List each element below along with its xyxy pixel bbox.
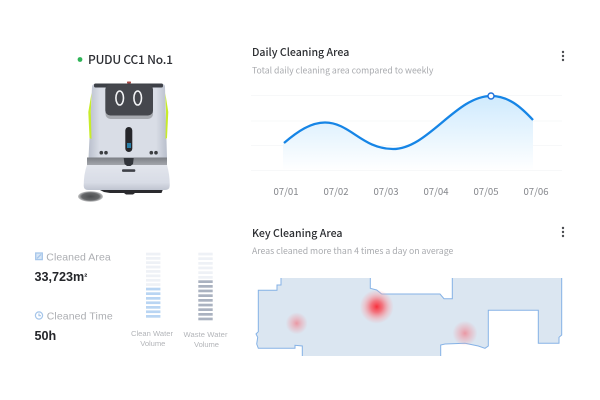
x axis labels: 07/02 xyxy=(323,184,349,198)
map shape xyxy=(256,278,562,356)
icon: area xyxy=(36,253,42,260)
waste water bars xyxy=(198,253,213,320)
value: 50h xyxy=(34,329,56,343)
value: 33,723m xyxy=(34,270,84,284)
gauge: waste water volume xyxy=(184,253,228,349)
x axis labels: 07/06 xyxy=(523,184,549,198)
icon: status dot xyxy=(78,57,82,62)
label: Volume xyxy=(140,339,165,348)
label xyxy=(184,330,228,349)
icon: more menu xyxy=(562,51,564,61)
heat spot: left xyxy=(286,312,308,334)
panel: key cleaning area xyxy=(252,226,564,356)
heading: Key Cleaning Area xyxy=(252,226,343,241)
x axis labels: 07/04 xyxy=(423,184,449,198)
line xyxy=(284,96,533,149)
panel: daily cleaning area xyxy=(251,45,564,198)
label: Cleaned Time xyxy=(47,310,113,322)
label: Volume xyxy=(194,340,219,349)
label: Cleaned Area xyxy=(46,252,111,264)
icon: more menu xyxy=(562,227,564,237)
subheading: Total daily cleaning area compared to weekly xyxy=(252,64,434,76)
icon: cleaning robot xyxy=(78,82,170,202)
area fill xyxy=(283,96,533,170)
heading: Daily Cleaning Area xyxy=(252,45,349,60)
peak marker xyxy=(488,93,494,99)
x axis labels: 07/03 xyxy=(373,184,399,198)
label: Clean Water xyxy=(131,329,173,338)
heat spot: main xyxy=(360,290,394,324)
stat: cleaned time xyxy=(34,310,113,343)
value: ² xyxy=(84,272,87,282)
heat spot: right xyxy=(452,321,478,346)
subheading: Areas cleaned more than 4 times a day on average xyxy=(252,244,453,257)
x axis labels: 07/05 xyxy=(473,184,499,198)
x axis labels: 07/01 xyxy=(273,184,299,198)
clean water bars xyxy=(146,253,160,318)
stat: cleaned area xyxy=(34,252,111,284)
robot title xyxy=(78,51,173,68)
label: Waste Water xyxy=(184,330,228,339)
x axis labels xyxy=(273,184,549,198)
robot name: PUDU CC1 No.1 xyxy=(88,51,173,68)
area chart xyxy=(251,93,562,198)
label xyxy=(131,329,173,348)
gauge: clean water volume xyxy=(131,253,173,348)
floor map xyxy=(256,278,562,356)
icon: clock xyxy=(35,312,43,319)
